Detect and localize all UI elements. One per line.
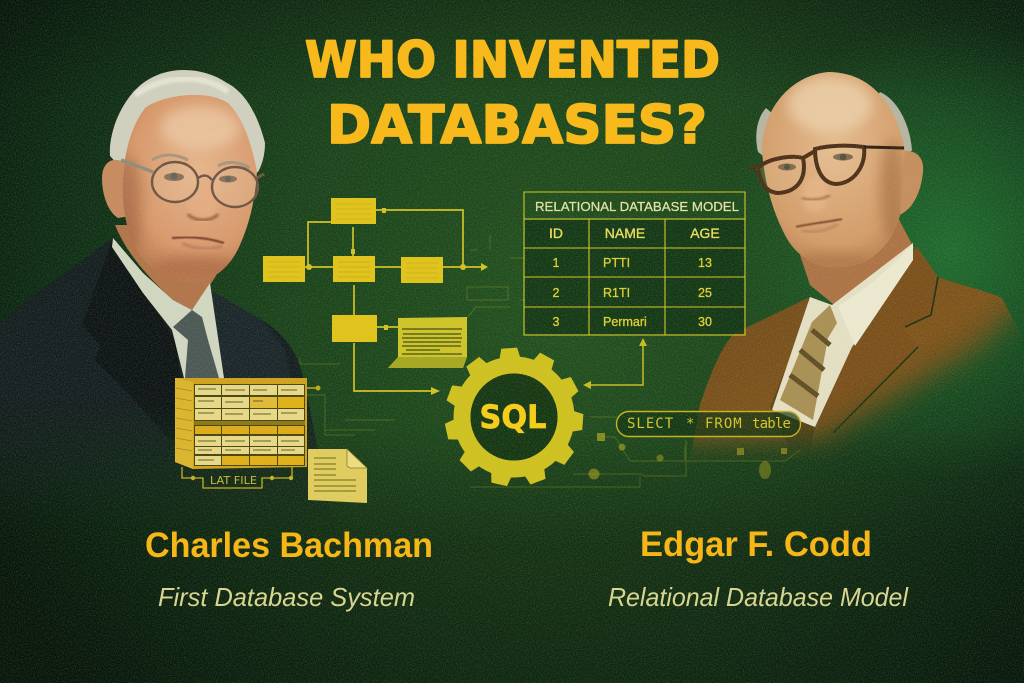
table rows: 13	[698, 256, 712, 270]
tie	[780, 305, 837, 420]
relational table	[524, 192, 745, 335]
SQL query pill: FROM	[705, 416, 743, 432]
box: top	[331, 198, 376, 224]
table header: NAME	[605, 225, 645, 241]
collar	[112, 238, 224, 378]
drawers lower	[195, 426, 304, 465]
box: left	[263, 256, 305, 282]
icon: SQL gear	[444, 347, 584, 487]
table rows: 3	[553, 315, 560, 329]
ear	[102, 160, 130, 218]
icon: SQL gear: SQL	[480, 398, 546, 436]
title	[305, 31, 720, 156]
drawers upper	[195, 385, 304, 420]
arrow: table to gear	[583, 338, 647, 389]
table rows: 1	[553, 256, 560, 270]
table rows: PTTI	[603, 256, 630, 270]
icon: document	[308, 449, 367, 503]
nodes and arrows	[306, 208, 488, 395]
table rows: 30	[698, 315, 712, 329]
box: bottom	[332, 315, 377, 342]
suit	[0, 238, 318, 489]
connector: cabinet to right	[307, 386, 320, 390]
table rows	[553, 256, 712, 329]
SQL query pill: table	[752, 416, 791, 432]
tie	[173, 310, 219, 378]
box: right	[401, 257, 443, 283]
ear	[895, 151, 923, 216]
hair silhouette	[110, 70, 265, 190]
icon: laptop	[388, 317, 467, 368]
face	[762, 72, 905, 268]
table rows: 25	[698, 286, 712, 300]
flowchart	[263, 198, 488, 395]
hair	[756, 92, 912, 175]
caption: relational database model: Relational Database Model	[608, 582, 909, 612]
title: WHO INVENTED	[305, 31, 720, 89]
faint circuit decoration	[300, 235, 800, 487]
table rows: R1TI	[603, 286, 630, 300]
portrait: Edgar F. Codd	[690, 60, 1024, 460]
SQL query pill: *	[686, 416, 695, 432]
title: DATABASES?	[327, 95, 707, 156]
connectors	[305, 210, 482, 391]
SQL query pill	[616, 412, 800, 436]
SQL query pill: SLECT	[627, 416, 674, 432]
face	[122, 94, 257, 274]
glasses	[750, 146, 904, 193]
grid	[524, 192, 745, 335]
caption: first database system: First Database System	[158, 582, 415, 612]
table header: AGE	[690, 225, 720, 241]
name: Charles Bachman: Charles Bachman	[145, 526, 433, 565]
box: centre	[333, 256, 375, 282]
glasses	[121, 160, 264, 207]
jacket	[690, 247, 1024, 460]
name: Edgar F. Codd: Edgar F. Codd	[640, 525, 872, 564]
table rows: Permari	[603, 315, 647, 329]
icon: file cabinet	[175, 378, 307, 469]
neck	[800, 210, 914, 304]
neck	[115, 225, 232, 310]
table header: ID	[549, 225, 563, 241]
table rows: 2	[553, 286, 560, 300]
label: flat file	[182, 467, 293, 488]
table header	[549, 225, 720, 241]
shirt	[772, 243, 913, 427]
table title: RELATIONAL DATABASE MODEL	[535, 199, 739, 214]
label: flat file: LAT FILE	[210, 475, 257, 487]
portrait: Charles Bachman	[0, 70, 318, 489]
